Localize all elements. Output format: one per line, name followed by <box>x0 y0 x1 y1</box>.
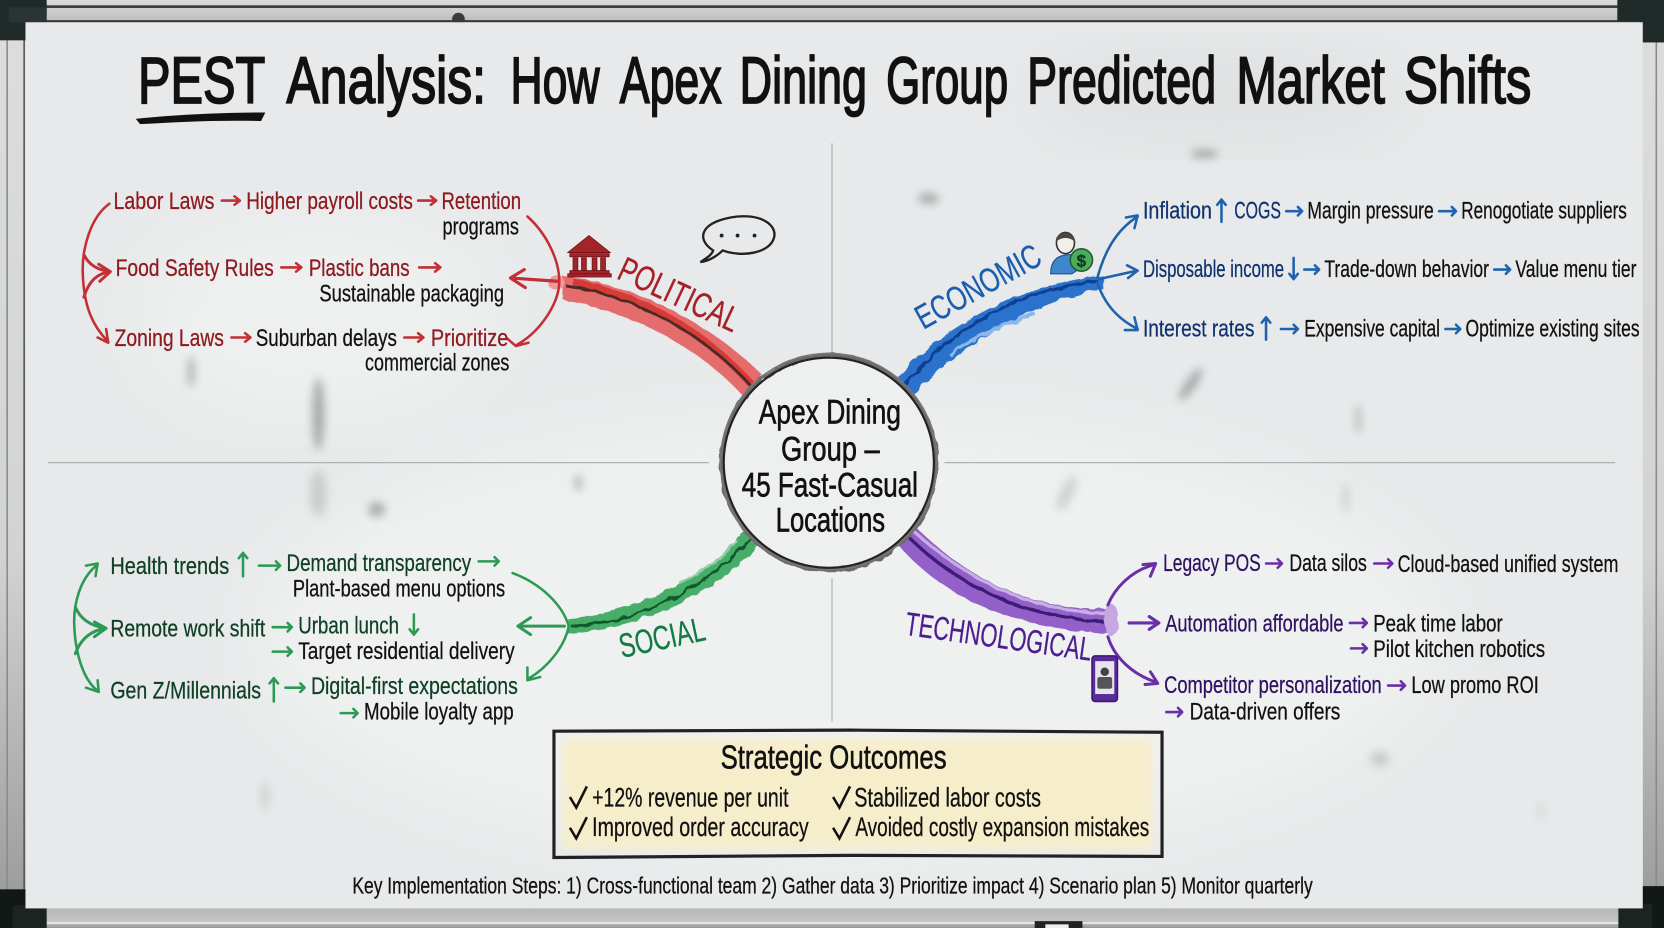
social brush stroke <box>568 525 763 634</box>
row: food safety: Sustainable packaging <box>319 280 504 307</box>
row: competitor: Low promo ROI <box>1411 672 1539 699</box>
economic fan arrows <box>1097 215 1138 330</box>
title: How <box>510 43 600 117</box>
row: remote work <box>110 613 515 665</box>
outcomes list <box>570 783 1149 842</box>
row: gen z: Digital-first expectations <box>311 673 518 700</box>
political label: POLITICAL <box>612 250 746 340</box>
row: labor laws: Labor Laws <box>114 188 214 215</box>
hub text <box>742 393 918 540</box>
panel: strategic outcomes <box>554 730 1162 857</box>
row: inflation: Inflation <box>1143 198 1212 225</box>
economic label: ECONOMIC <box>909 237 1048 337</box>
row: disposable income <box>1143 256 1636 283</box>
row: inflation <box>1143 198 1627 225</box>
icon: government building <box>568 236 611 277</box>
row: food safety: Plastic bans <box>309 255 410 282</box>
row: competitor: Data-driven offers <box>1190 699 1340 726</box>
row: competitor: Competitor personalization <box>1164 672 1382 699</box>
row: food safety: Food Safety Rules <box>116 255 274 282</box>
hub text: Group – <box>781 431 880 469</box>
outcomes list: Improved order accuracy <box>592 812 809 842</box>
row: health trends: Demand transparency <box>287 550 472 577</box>
title: PEST <box>138 43 265 117</box>
title: Analysis: <box>287 43 486 117</box>
title: Shifts <box>1404 43 1531 117</box>
row: legacy pos: Data silos <box>1289 550 1367 577</box>
row: gen z: Gen Z/Millennials <box>110 677 261 704</box>
row: interest rates <box>1143 315 1640 342</box>
icon: person with dollar coin: $ <box>1077 251 1087 270</box>
row: gen z: Mobile loyalty app <box>364 699 514 726</box>
economic brush stroke <box>898 276 1104 396</box>
outcomes list: Avoided costly expansion mistakes <box>855 812 1149 842</box>
row: disposable income: Trade-down behavior <box>1324 256 1489 283</box>
title: Group <box>886 43 1008 117</box>
row: zoning laws <box>115 325 509 376</box>
row: disposable income: Disposable income <box>1143 256 1284 283</box>
row: inflation: Margin pressure <box>1307 198 1434 225</box>
title: Predicted <box>1027 43 1216 117</box>
row: remote work: Target residential delivery <box>298 638 515 665</box>
row: zoning laws: commercial zones <box>365 349 509 376</box>
icon: smartphone <box>1092 656 1117 701</box>
implementation steps footer: Key Implementation Steps: 1) Cross-functional team 2) Gather data 3) Prioritize impact 4) Scenario plan 5) Monitor quarterly <box>352 873 1313 899</box>
panel: economic <box>898 198 1640 396</box>
row: health trends: Health trends <box>110 553 229 580</box>
hub text: Locations <box>776 502 885 540</box>
row: labor laws: Higher payroll costs <box>246 188 413 215</box>
outcomes list: Stabilized labor costs <box>854 783 1041 813</box>
hub text: Apex Dining <box>759 393 901 431</box>
row: automation <box>1165 610 1545 663</box>
row: zoning laws: Zoning Laws <box>115 325 224 352</box>
title: Dining <box>740 43 867 117</box>
social fan arrows <box>74 564 569 692</box>
row: interest rates: Expensive capital <box>1304 315 1440 342</box>
title <box>136 43 1531 124</box>
row: gen z <box>110 673 518 726</box>
title: Apex <box>620 43 722 117</box>
technological brush stroke <box>898 524 1119 636</box>
row: legacy pos: Legacy POS <box>1163 550 1261 577</box>
icon: person with dollar coin <box>1051 232 1093 274</box>
political brush stroke <box>548 275 762 398</box>
technological label: TECHNOLOGICAL <box>903 605 1094 668</box>
row: labor laws <box>114 188 521 241</box>
row: labor laws: programs <box>443 214 519 241</box>
row: zoning laws: Suburban delays <box>256 325 397 352</box>
box outline <box>554 730 1162 857</box>
row: automation: Automation affordable <box>1165 610 1344 637</box>
row: labor laws: Retention <box>441 188 521 215</box>
panel: political <box>83 188 774 398</box>
panel: social <box>74 525 763 726</box>
row: inflation: COGS <box>1234 198 1281 225</box>
yellow highlight <box>562 739 1152 849</box>
outcomes heading: Strategic Outcomes <box>721 738 947 775</box>
icon: speech bubble <box>700 216 774 262</box>
central hub circle <box>721 353 937 570</box>
outcomes list: +12% revenue per unit <box>592 783 789 813</box>
social label: SOCIAL <box>616 611 709 666</box>
row: zoning laws: Prioritize <box>431 325 508 352</box>
technological fan arrows <box>1108 564 1159 684</box>
row: health trends <box>110 550 505 602</box>
hub text: 45 Fast-Casual <box>742 467 918 505</box>
row: food safety <box>116 255 504 307</box>
row: legacy pos <box>1163 550 1618 578</box>
row: remote work: Remote work shift <box>110 616 265 643</box>
panel: technological <box>898 524 1618 726</box>
row: automation: Pilot kitchen robotics <box>1373 636 1545 663</box>
row: competitor <box>1164 672 1539 726</box>
title: Market <box>1236 43 1385 117</box>
row: health trends: Plant-based menu options <box>293 575 505 602</box>
row: interest rates: Interest rates <box>1143 315 1254 342</box>
row: remote work: Urban lunch <box>298 613 399 640</box>
row: automation: Peak time labor <box>1373 610 1503 637</box>
political fan arrows <box>83 204 559 346</box>
